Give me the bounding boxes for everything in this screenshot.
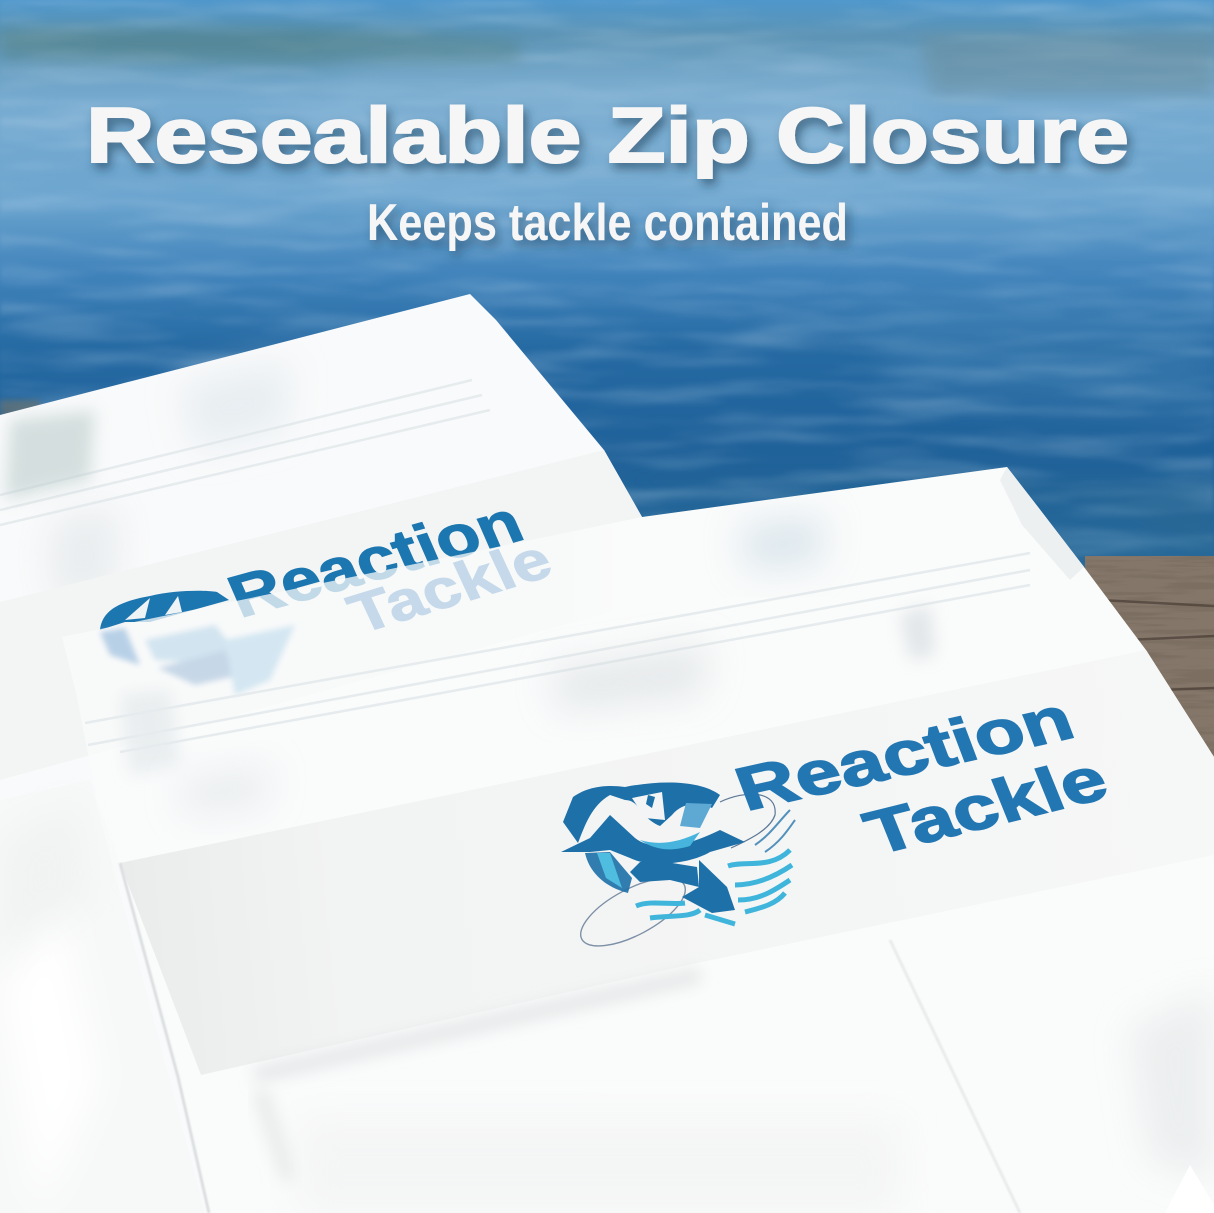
back bag wordmark: Tackle: [338, 528, 561, 645]
fish body: [561, 815, 745, 864]
fish head and back: [563, 782, 720, 843]
wordmark Reaction: Reaction: [726, 685, 1083, 824]
wordmark Tackle: Tackle: [855, 745, 1117, 868]
back bag zipper area: [0, 360, 490, 600]
film shadows and highlights: [180, 467, 1084, 815]
back bag: [0, 294, 800, 1213]
fish fin: [630, 862, 699, 887]
splash: [636, 850, 792, 924]
wooden dock: [1085, 556, 1214, 760]
front bag: [62, 467, 1214, 1213]
water background: [0, 0, 1214, 600]
fish mouth: [680, 803, 712, 828]
brand logo: [561, 685, 1117, 960]
back bag wordmark: Reaction: [218, 488, 532, 630]
back bag fish logo: [100, 591, 229, 630]
fish eye area: [632, 792, 665, 820]
back bag label band: [0, 450, 655, 780]
lower pocket: [255, 860, 1214, 1213]
ghosted back fish: [100, 625, 295, 695]
fish mark: [561, 782, 795, 960]
fish belly: [585, 852, 632, 893]
front bag label band: [120, 650, 1214, 1075]
front bag zipper: [85, 553, 1030, 775]
front bag upper film: [62, 467, 1214, 1213]
back bag wordmark: [218, 488, 561, 645]
subtitle: Keeps tackle contained: [367, 194, 848, 252]
title: Resealable Zip Closure: [86, 91, 1129, 179]
